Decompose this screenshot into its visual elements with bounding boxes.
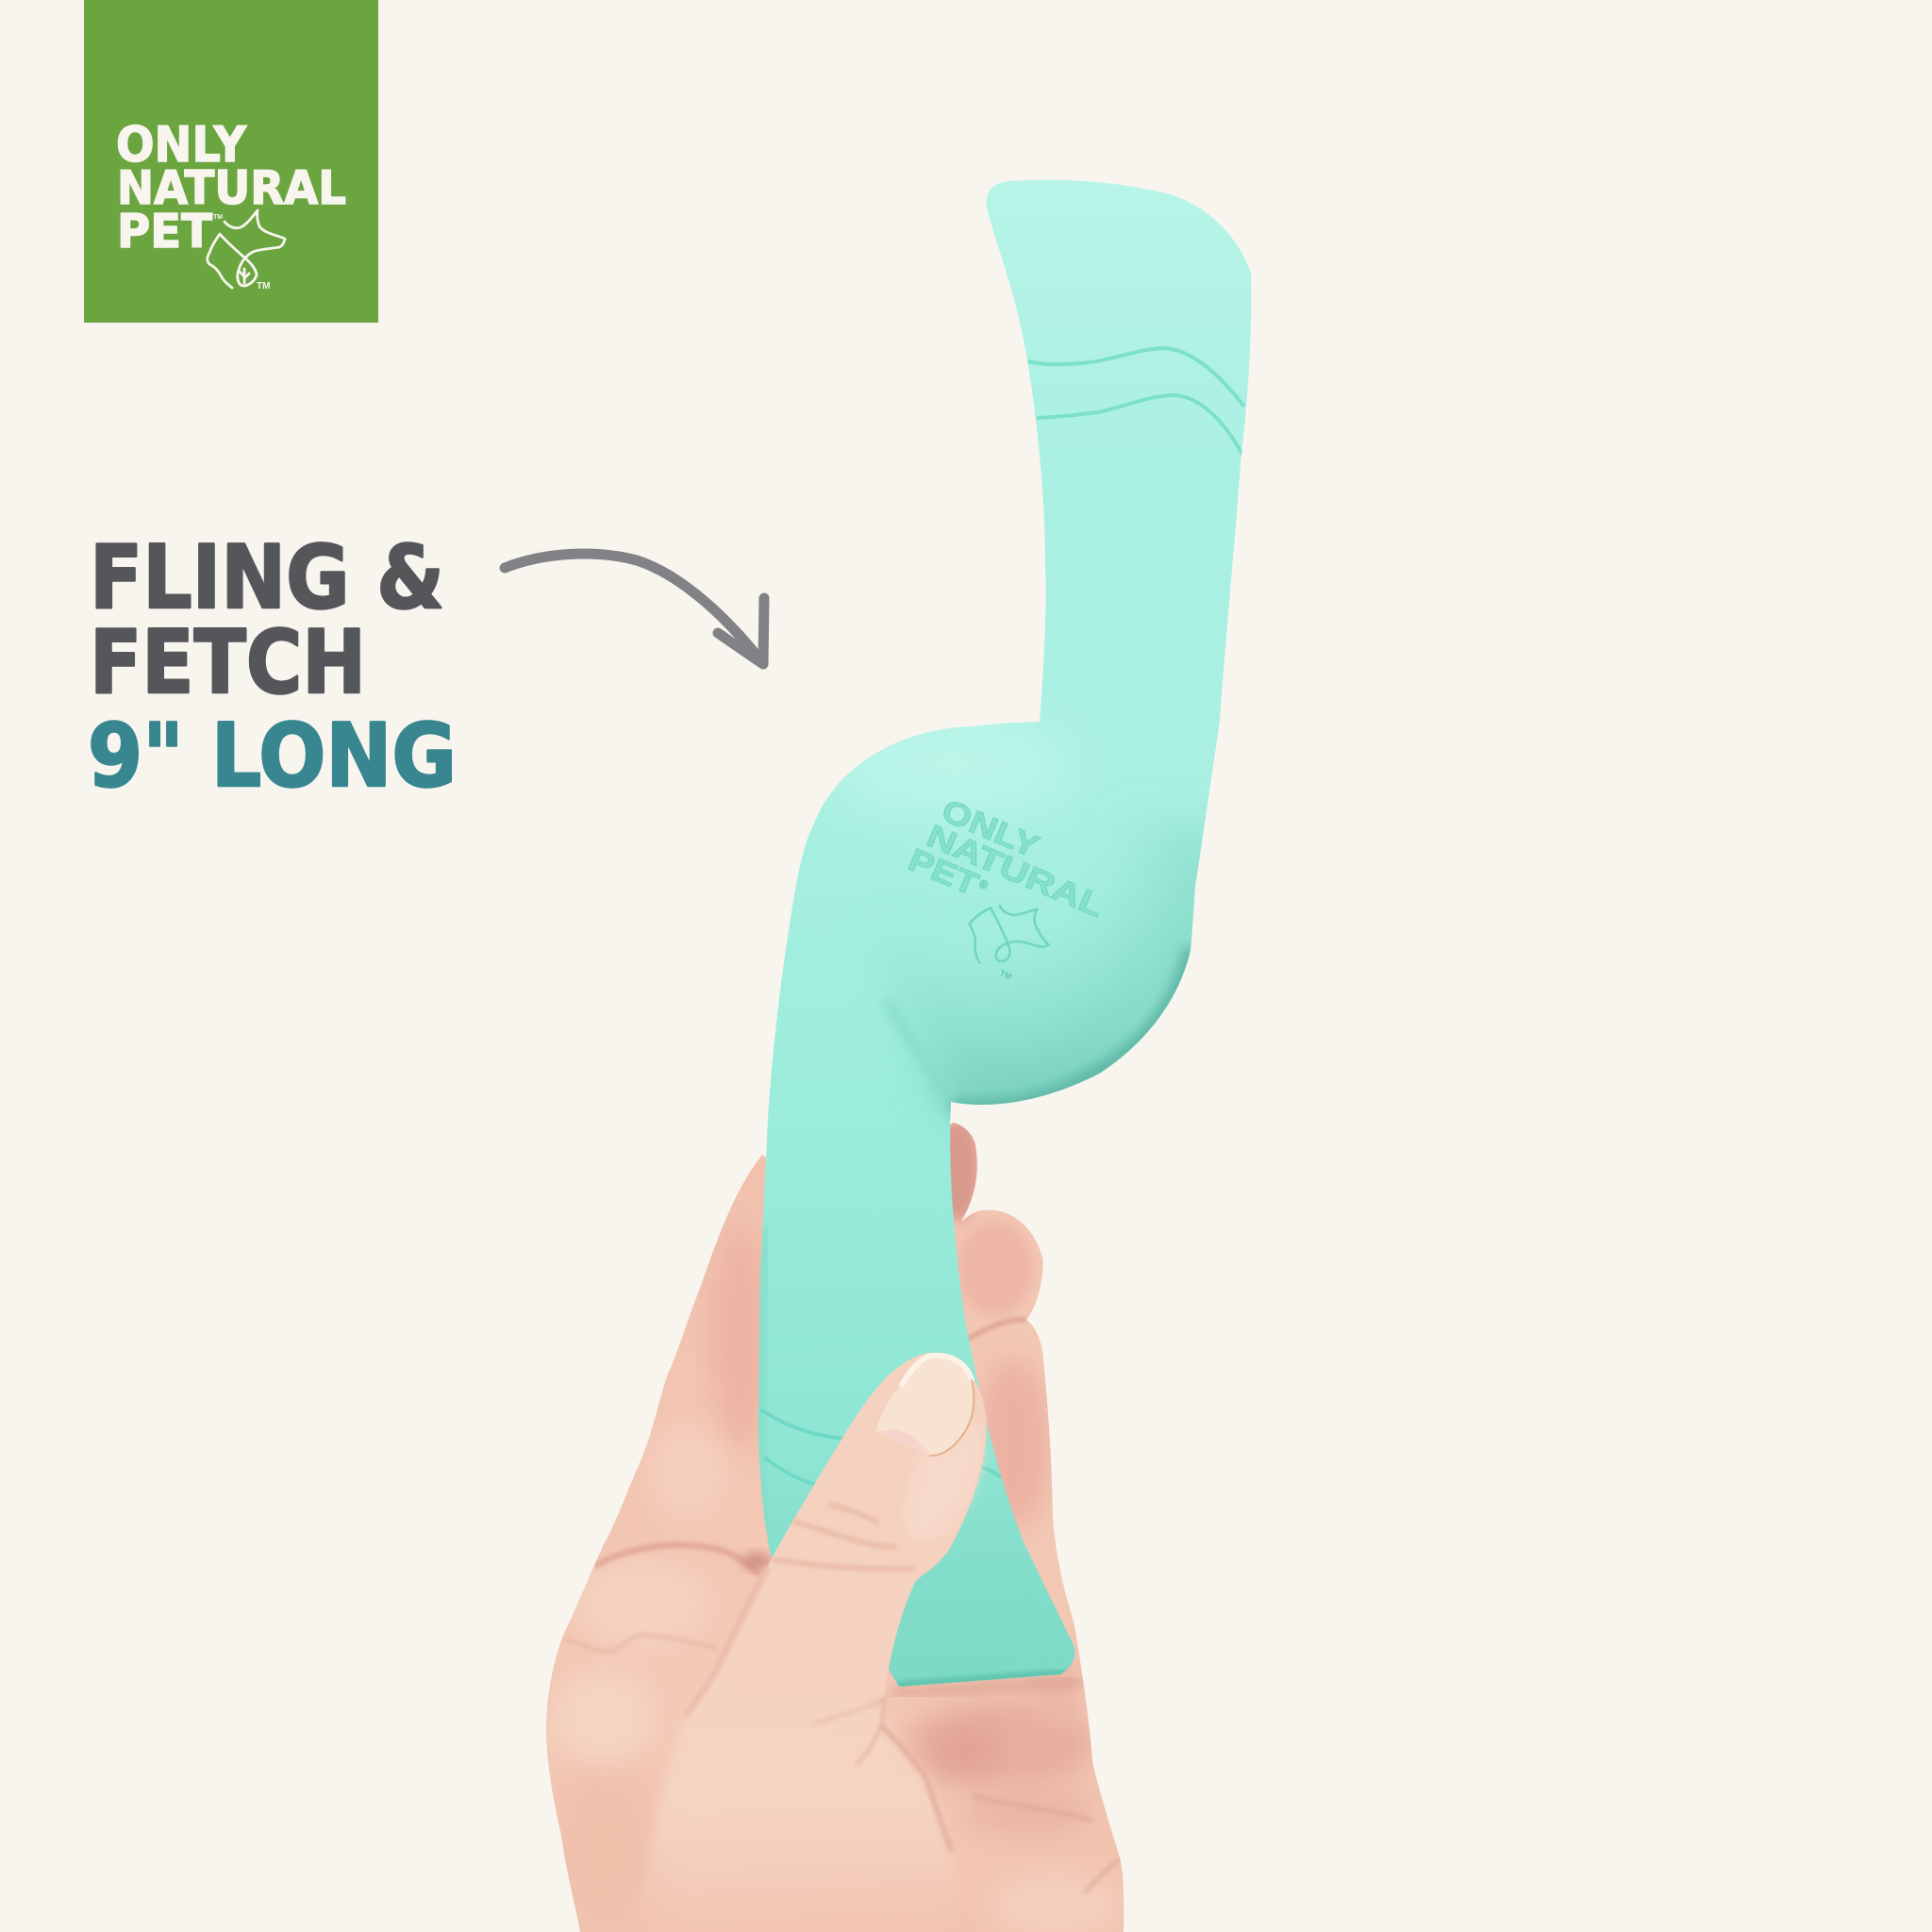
shadow below toy [891, 1681, 1080, 1693]
logo wordmark: PET [117, 205, 213, 258]
embossed wordmark: ® [977, 876, 991, 892]
embossed brand mark on ball [908, 802, 1099, 979]
crease between ball and lower stem [886, 1002, 923, 1057]
lower stem fade [889, 1547, 1061, 1679]
embossed wordmark: NATURAL [922, 818, 1109, 924]
thumbnail side fold [929, 1379, 974, 1456]
embossed wordmark: ONLY [937, 792, 1044, 865]
logo trademark marks [213, 214, 270, 291]
thumb base blending into the palm [641, 1657, 958, 1924]
toy ball shading [909, 823, 1205, 1124]
toy: fling and fetch teal rubber toy [758, 179, 1251, 1687]
thumbnail lunula [879, 1429, 929, 1453]
thumbnail rim [902, 1356, 972, 1385]
palm and fingers silhouette [546, 1123, 1124, 1932]
logo trademark marks: TM [213, 214, 223, 221]
embossed trademark: TM [998, 968, 1013, 982]
ball shadow along lower edge [951, 948, 1192, 1108]
infographic canvas [84, 0, 1251, 1932]
thumb silhouette [723, 1353, 987, 1698]
heading line: fetch: FETCH [90, 611, 366, 713]
upper ridge lines [1028, 348, 1244, 455]
lower stem left edge shadow [759, 1226, 766, 1557]
palm left creases [594, 1545, 760, 1575]
toy foot bottom edge shadow [896, 1673, 1066, 1685]
lower ridge lines [760, 1409, 1002, 1486]
logo wordmark: NATURAL [117, 161, 346, 215]
logo wordmark: ONLY [116, 117, 247, 174]
toy body [758, 179, 1251, 1687]
logo trademark marks: TM [257, 281, 270, 291]
brand logo badge [84, 0, 378, 323]
logo wordmark [116, 117, 346, 258]
green badge panel [84, 0, 378, 323]
thumbnail [875, 1356, 974, 1455]
thumb tip lighter area [888, 1408, 999, 1554]
dark notch beside toy [741, 1553, 772, 1570]
heading line: 9 inch long: 9" LONG [88, 705, 457, 807]
logo dog, cat and leaf line icon [208, 210, 285, 288]
embossed wordmark: PET [903, 842, 983, 903]
heading line: fling &: FLING & [90, 526, 444, 628]
thumb in front of the toy [641, 1353, 999, 1924]
ball highlight [830, 717, 1075, 811]
hand behind the toy [546, 1118, 1124, 1932]
thumb base and palm creases [687, 1569, 951, 1849]
hand shading and creases [552, 1118, 1123, 1932]
heading: fling and fetch, 9 inch long [88, 526, 457, 807]
arrow pointing at the toy [505, 554, 764, 664]
thumb knuckle creases [774, 1505, 913, 1569]
embossed wordmark [908, 802, 1099, 918]
embossed dog, cat and leaf icon [968, 904, 1050, 964]
